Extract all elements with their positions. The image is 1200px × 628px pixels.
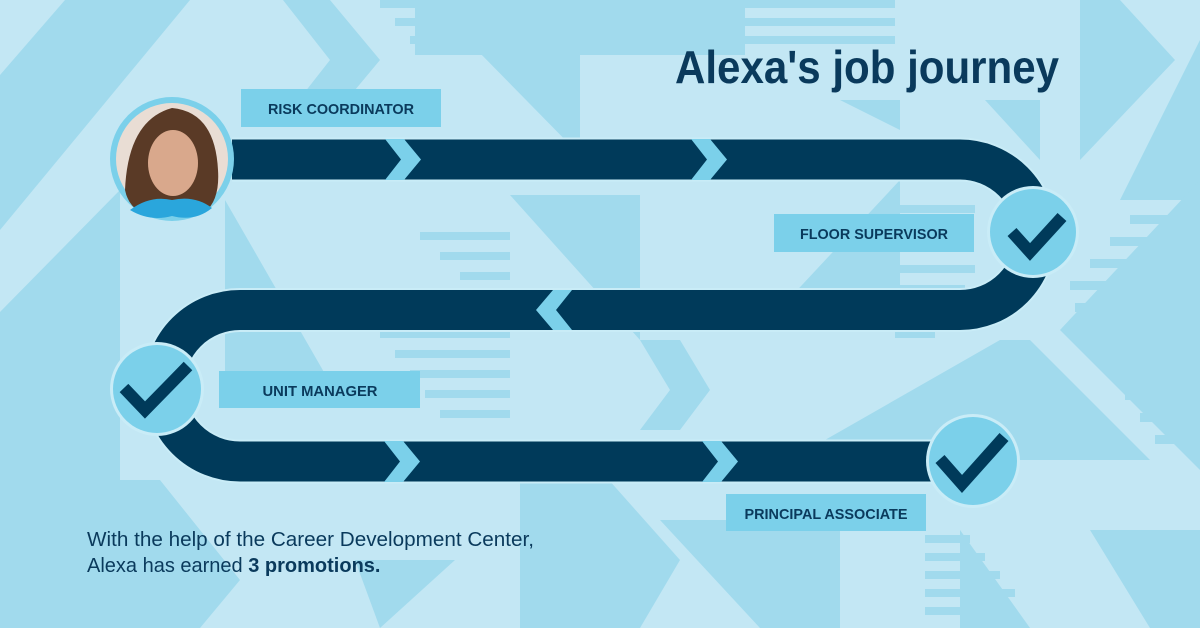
label: principal associate: PRINCIPAL ASSOCIATE <box>744 506 908 523</box>
label: floor supervisor: FLOOR SUPERVISOR <box>800 226 948 243</box>
journey path <box>164 139 1035 482</box>
label: unit manager <box>219 371 420 408</box>
label: risk coordinator: RISK COORDINATOR <box>268 101 414 118</box>
summary text: Alexa has earned 3 promotions. <box>87 555 380 577</box>
icon: check principal associate <box>926 414 1020 508</box>
summary text <box>87 529 534 577</box>
photo: Alexa <box>110 97 234 221</box>
arrow chevrons <box>384 139 738 482</box>
label: risk coordinator <box>241 89 441 127</box>
label: floor supervisor <box>774 214 974 252</box>
icon: check unit manager <box>110 342 204 436</box>
title: Alexa's job journey <box>675 41 1059 93</box>
label: unit manager: UNIT MANAGER <box>262 383 378 400</box>
icon: check floor supervisor <box>987 186 1079 278</box>
summary text: With the help of the Career Development Center, <box>87 529 534 551</box>
label: principal associate <box>726 494 926 531</box>
